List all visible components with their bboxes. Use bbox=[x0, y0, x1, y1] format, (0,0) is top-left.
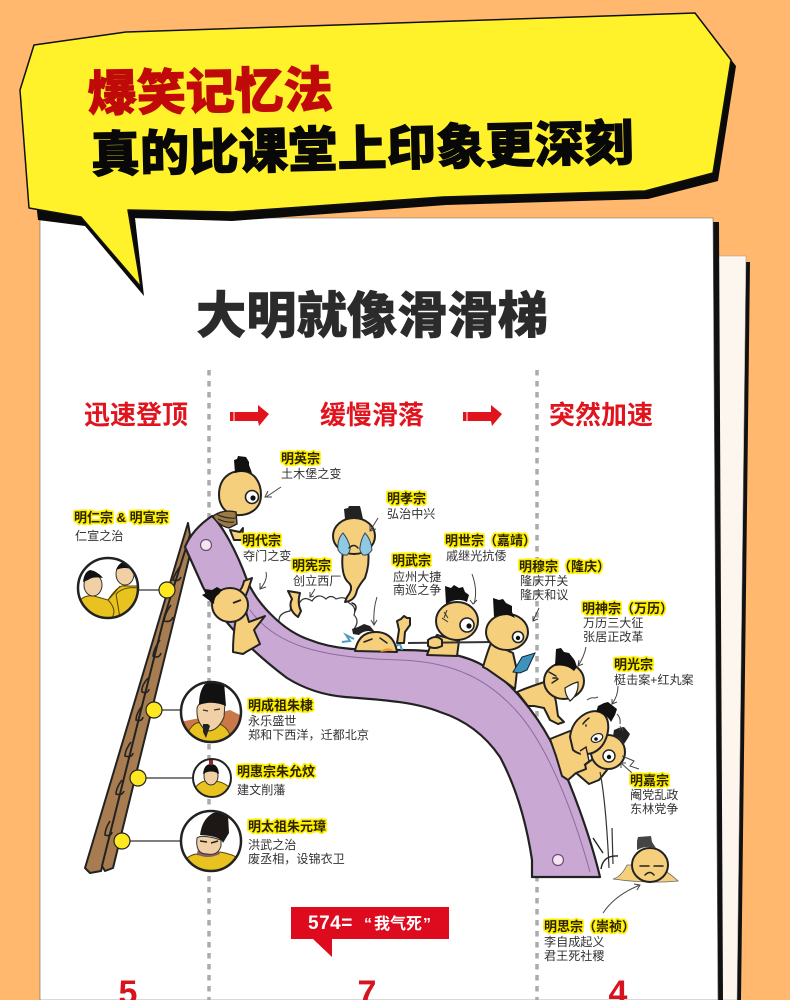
red callout 574: 我气死 bbox=[374, 915, 422, 933]
front paper panel bbox=[40, 218, 723, 1000]
label: Yongle: 明成祖朱棣 bbox=[248, 698, 313, 713]
character: Xianzong foot bbox=[288, 591, 301, 617]
phase heading: slow slide: 缓慢滑落 bbox=[320, 400, 424, 430]
label: Hongwu bbox=[248, 819, 345, 866]
label: Xianzong: 明宪宗 bbox=[292, 558, 331, 573]
arrow right 2 bbox=[463, 405, 502, 426]
label: Shizong: 戚继光抗倭 bbox=[446, 548, 506, 563]
red callout 574: ” bbox=[423, 916, 431, 933]
back paper sheet bbox=[700, 256, 750, 1000]
character: Xizong falling bbox=[575, 726, 639, 869]
red callout 574: “ bbox=[364, 916, 372, 933]
label: Hongwu: 明太祖朱元璋 bbox=[248, 819, 326, 834]
label: Renzong and Xuanzong: 明仁宗 & 明宣宗 bbox=[74, 510, 169, 525]
label: Xianzong: 创立西厂 bbox=[293, 573, 341, 588]
phase heading: sudden acceleration: 突然加速 bbox=[549, 400, 653, 430]
label: Yongle: 永乐盛世 bbox=[248, 713, 296, 728]
label: Hongwu: 洪武之治 bbox=[248, 838, 296, 852]
label: Jianwen bbox=[237, 764, 315, 797]
label: Daizong: 明代宗 bbox=[242, 533, 281, 548]
main title: 大明就像滑滑梯 bbox=[196, 288, 548, 344]
label: Daizong: 夺门之变 bbox=[243, 548, 291, 563]
label: Shizong bbox=[445, 533, 536, 563]
label: Xiaozong bbox=[387, 491, 435, 521]
label: Xizong bbox=[630, 773, 678, 816]
phase heading: rapid ascent: 迅速登顶 bbox=[84, 400, 188, 430]
label: Jianwen: 建文削藩 bbox=[237, 782, 285, 797]
arrow right 1 bbox=[230, 405, 269, 426]
portrait: Hongwu emperor bbox=[180, 811, 244, 876]
label: Muzong: 隆庆开关 bbox=[520, 573, 568, 588]
label: Xiaozong: 明孝宗 bbox=[387, 491, 426, 506]
label: Guangzong bbox=[614, 657, 694, 687]
label: Shenzong: 明神宗（万历） bbox=[582, 601, 673, 616]
annotation arrows bbox=[260, 487, 640, 913]
character: Xiaozong crying ghost bbox=[333, 506, 375, 611]
label: Renzong and Xuanzong: 仁宣之治 bbox=[75, 528, 123, 543]
label: Jianwen: 明惠宗朱允炆 bbox=[237, 764, 315, 779]
dotted divider right bbox=[535, 370, 539, 1000]
ladder bbox=[85, 523, 194, 873]
character: Daizong sliding bbox=[202, 578, 265, 654]
label: Yongle bbox=[248, 698, 369, 742]
heading line: black: 真的比课堂上印象更深刻 bbox=[90, 117, 634, 183]
red callout 574: 574= bbox=[308, 913, 353, 934]
label: Sizong: 明思宗（崇祯） bbox=[544, 919, 635, 934]
label: Yongle: 郑和下西洋，迁都北京 bbox=[248, 727, 369, 742]
label: Xiaozong: 弘治中兴 bbox=[387, 506, 435, 521]
character: Wuzong splashing bbox=[342, 616, 410, 652]
speech bubble header bbox=[20, 13, 736, 296]
cloud of dust bbox=[279, 596, 357, 629]
label: Yingzong: 土木堡之变 bbox=[281, 466, 341, 481]
label: Shenzong bbox=[582, 601, 673, 644]
label: Shizong: 明世宗（嘉靖） bbox=[445, 533, 536, 548]
character: Yingzong tied by the neck bbox=[213, 456, 261, 540]
label: Shenzong: 万历三大征 bbox=[583, 616, 643, 630]
dotted divider left bbox=[207, 370, 211, 1000]
label: Xizong: 明嘉宗 bbox=[630, 773, 669, 788]
label: Xizong: 东林党争 bbox=[630, 801, 678, 816]
red callout 574 bbox=[291, 907, 449, 957]
character: Muzong reading book bbox=[483, 598, 535, 689]
label: Sizong bbox=[544, 919, 635, 963]
label: Shenzong: 张居正改革 bbox=[583, 630, 643, 644]
portrait: Yongle emperor bbox=[180, 681, 242, 747]
ladder marker dots bbox=[114, 582, 175, 849]
portrait: Renzong and Xuanzong bbox=[76, 558, 140, 620]
label: Guangzong: 明光宗 bbox=[614, 657, 653, 672]
label: Muzong: 明穆宗（隆庆） bbox=[519, 559, 610, 574]
label: Renzong and Xuanzong bbox=[74, 510, 169, 543]
label: Xizong: 阉党乱政 bbox=[630, 787, 678, 802]
portrait: Jianwen emperor bbox=[193, 758, 231, 799]
label: Sizong: 李自成起义 bbox=[544, 934, 604, 949]
label: Yingzong bbox=[281, 451, 341, 481]
character: Shizong with rope bbox=[408, 585, 493, 656]
label: Xianzong bbox=[292, 558, 341, 588]
label: Muzong bbox=[519, 559, 610, 602]
label: Guangzong: 梃击案+红丸案 bbox=[614, 672, 694, 687]
label: Wuzong: 应州大捷 bbox=[393, 569, 441, 584]
label: Sizong: 君王死社稷 bbox=[544, 948, 604, 963]
heading line: red: 爆笑记忆法 bbox=[87, 64, 333, 122]
purple slide bbox=[185, 516, 600, 877]
character: Shenzong angry bbox=[517, 648, 584, 724]
label: Yingzong: 明英宗 bbox=[281, 451, 320, 466]
character: Guangzong tumbling bbox=[550, 697, 623, 780]
label: Daizong bbox=[242, 533, 291, 563]
connector lines bbox=[122, 590, 192, 841]
label: Wuzong: 南巡之争 bbox=[393, 582, 441, 597]
label: Hongwu: 废丞相，设锦衣卫 bbox=[248, 851, 345, 866]
character: Sizong flat on the ground bbox=[613, 836, 678, 882]
label: Wuzong: 明武宗 bbox=[392, 553, 431, 568]
label: Muzong: 隆庆和议 bbox=[520, 587, 568, 602]
label: Wuzong bbox=[392, 553, 441, 597]
